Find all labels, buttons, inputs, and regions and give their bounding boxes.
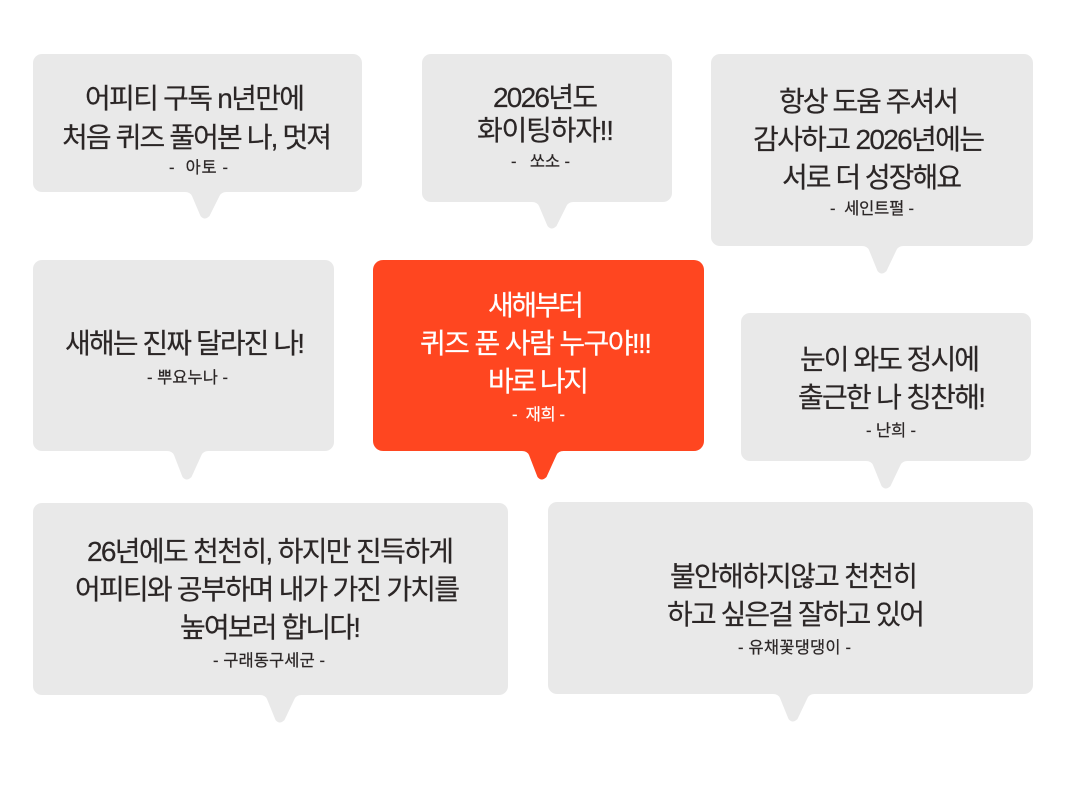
bubble: 구래동구세군: 어피티와 공부하며 내가 가진 가치를 — [75, 574, 460, 605]
message: 새해는 진짜 달라진 나! — [65, 328, 305, 359]
message: 눈이 와도 정시에 — [800, 344, 980, 375]
message: 항상 도움 주셔서 — [779, 86, 959, 117]
message: 2026년도 — [493, 82, 598, 113]
bubble: 재희 (highlighted): 퀴즈 푼 사람 누구야!!! — [420, 328, 652, 359]
author: - 아토 - — [169, 158, 228, 177]
bubble: 아토: 처음 퀴즈 풀어본 나, 멋져 — [62, 122, 332, 153]
bubble: 뿌요누나 — [33, 260, 334, 480]
author: - 세인트펄 - — [830, 199, 914, 218]
bubble: 유채꽃댕댕이 — [548, 502, 1033, 722]
message: 26년에도 천천히, 하지만 진득하게 — [87, 536, 454, 567]
author: - 뿌요누나 - — [147, 368, 228, 387]
bubble: 세인트펄: 서로 더 성장해요 — [782, 162, 962, 193]
bubble: 재희 (highlighted) — [373, 260, 704, 480]
message: 어피티 구독 n년만에 — [85, 83, 305, 114]
bubble: 난희 — [741, 313, 1031, 488]
bubble: 세인트펄 — [711, 54, 1033, 274]
author: - 쏘소 - — [511, 153, 570, 171]
author: - 난희 - — [866, 421, 916, 440]
bubble: 구래동구세군 — [33, 503, 508, 722]
bubble: 재희 (highlighted): 바로 나지 — [488, 366, 589, 397]
bubble: 쏘소: 화이팅하자!! — [477, 115, 614, 146]
bubble: 아토 — [33, 54, 362, 218]
message: 새해부터 — [488, 290, 584, 321]
bubble: 세인트펄: 감사하고 2026년에는 — [753, 124, 985, 155]
bubble: 난희: 출근한 나 칭찬해! — [798, 382, 986, 413]
author: - 구래동구세군 - — [213, 651, 325, 670]
bubble: 쏘소 — [422, 54, 672, 228]
author: - 유채꽃댕댕이 - — [738, 638, 851, 657]
bubble: 유채꽃댕댕이: 하고 싶은걸 잘하고 있어 — [667, 599, 925, 630]
message: 불안해하지않고 천천히 — [670, 561, 918, 592]
bubble: 구래동구세군: 높여보러 합니다! — [180, 612, 361, 643]
author: - 재희 - — [512, 405, 565, 424]
